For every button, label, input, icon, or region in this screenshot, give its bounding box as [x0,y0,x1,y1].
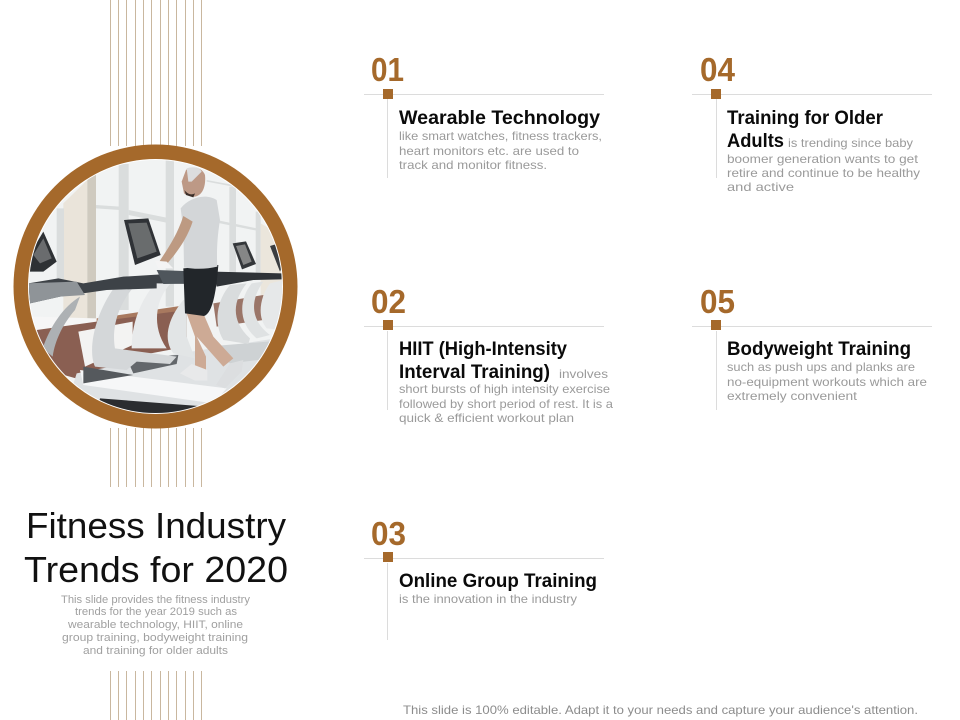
slide description: This slide provides the fitness industry [61,594,250,606]
trend 01: Wearable Technology [399,108,600,129]
handlebars [29,274,184,304]
title: Fitness Industry [26,505,286,546]
slide description [61,594,250,657]
trend 05: 05 [700,283,735,320]
trend 05: such as push ups and planks are [727,360,915,374]
trend 03: is the innovation in the industry [399,592,577,606]
trend 04: Adults [727,131,784,152]
man [187,313,233,372]
photo ring [14,144,298,428]
slide description: group training, bodyweight training [62,632,248,644]
trend 03: 03 [371,515,406,552]
trend 04 [692,51,932,194]
trend 01 [364,51,604,178]
trend 04: and active [727,180,794,194]
window sill [64,318,96,326]
trend 05: no-equipment workouts which are [727,375,927,389]
trend 04: Training for Older [727,108,884,129]
radiator [78,322,133,367]
trend 02: quick & efficient workout plan [399,411,574,425]
trend 02: followed by short period of rest. It is a [399,397,613,411]
title [24,505,288,590]
trend 01: 01 [371,51,404,88]
trend 01: track and monitor fitness. [399,158,547,172]
trend 05: Bodyweight Training [727,339,911,360]
trend 02: Interval Training) [399,362,550,383]
decorative vertical stripes [110,0,202,720]
brick wall [37,310,187,380]
trend 02 [364,283,613,425]
treadmill uprights [43,297,80,357]
gym scene illustration [27,157,287,427]
trend 04: retire and continue to be healthy [727,166,920,180]
slide description: wearable technology, HIIT, online [67,619,243,631]
trend 04: 04 [700,51,736,88]
trend 02: HIIT (High-Intensity [399,339,567,360]
circular treadmill photo [14,144,298,428]
footer note: This slide is 100% editable. Adapt it to your needs and capture your audience's attention. [403,703,918,717]
trend 04: is trending since baby [788,136,913,150]
trend 02: short bursts of high intensity exercise [399,382,610,396]
floor and decks [74,339,270,406]
trend 03: Online Group Training [399,571,597,592]
slide description: trends for the year 2019 such as [75,606,238,618]
trend 05 [692,283,932,410]
curtains and window frames [63,180,87,327]
trend 02: 02 [371,283,406,320]
trend 02: involves [559,367,608,381]
consoles [124,218,161,265]
trend 05: extremely convenient [727,389,858,403]
trend 03 [364,515,604,640]
slide description: and training for older adults [83,645,229,657]
trend 04: boomer generation wants to get [727,152,919,166]
trend 01: heart monitors etc. are used to [399,144,579,158]
title: Trends for 2020 [24,549,288,590]
trend 01: like smart watches, fitness trackers, [399,129,602,143]
